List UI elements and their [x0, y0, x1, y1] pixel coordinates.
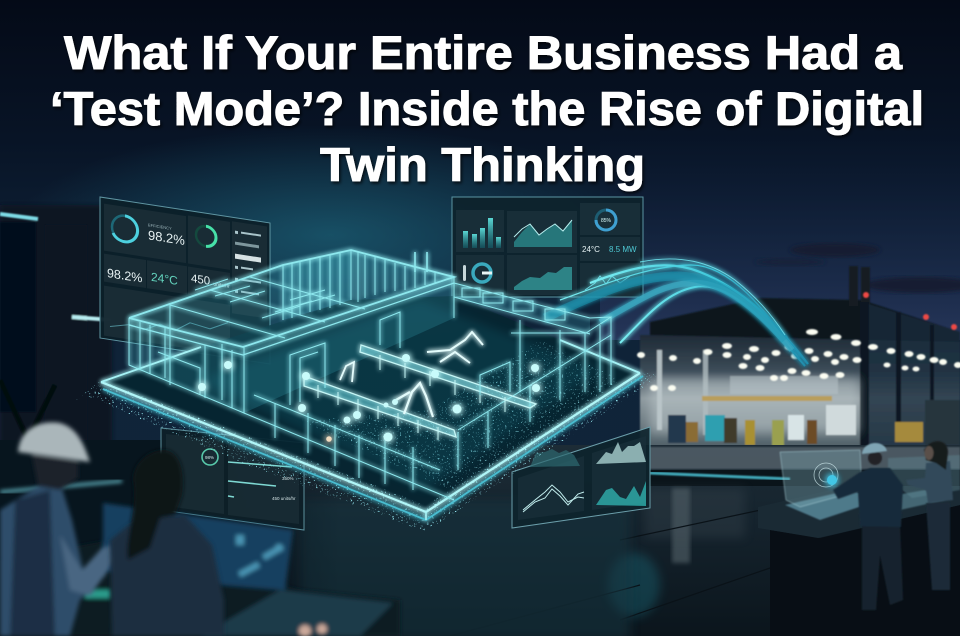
- face: [924, 446, 934, 460]
- cards: [456, 203, 640, 296]
- noisy area chart: [530, 449, 580, 467]
- hard hat: [862, 443, 887, 454]
- warning beacons: [863, 292, 957, 330]
- legs: [926, 503, 950, 590]
- status list: [235, 231, 261, 297]
- title line two: ‘Test Mode’? Inside the Rise of Digital: [50, 82, 924, 135]
- machinery and workers: [668, 400, 960, 446]
- console top: [758, 490, 960, 538]
- efficiency label: EFFICIENCY: [148, 222, 172, 231]
- particles: [70, 372, 662, 532]
- metric value two: 350%: [282, 476, 294, 481]
- portal frames: [290, 312, 510, 405]
- throughput value: 450 units/hr: [191, 273, 230, 291]
- panel cards: [104, 202, 267, 361]
- data wave ribbons: [545, 259, 808, 366]
- back right wall: [454, 283, 611, 470]
- torso and arm: [906, 461, 953, 503]
- second engineer: [906, 441, 953, 590]
- mini chart: [110, 305, 228, 345]
- robot arm front: [396, 383, 433, 417]
- digital twin platform: [70, 250, 662, 532]
- floor haze: [200, 300, 600, 490]
- chimneys: [849, 266, 870, 307]
- front lower wall: [244, 395, 454, 500]
- back conveyor: [360, 345, 536, 412]
- steel columns: [657, 302, 934, 452]
- floor: [0, 445, 960, 636]
- platform floor: [101, 296, 640, 512]
- power reading: 8.5 MW: [609, 245, 637, 254]
- building wireframe: [129, 250, 611, 500]
- console screen two: [885, 490, 945, 510]
- left wing: [129, 250, 454, 413]
- line chart: [523, 485, 584, 512]
- foreground console at left: [0, 503, 400, 636]
- bright plant core: [650, 378, 860, 433]
- tanks: [415, 252, 427, 272]
- platform rim: [101, 340, 643, 520]
- area chart bottom: [514, 267, 572, 290]
- head: [868, 451, 882, 465]
- bar chart: [463, 218, 501, 248]
- robot arm mid: [340, 362, 354, 382]
- torso and arm: [833, 468, 903, 527]
- shirt dark: [10, 490, 55, 636]
- robot arm rear: [427, 332, 483, 363]
- hard hat: [18, 422, 90, 462]
- title: [50, 26, 924, 191]
- head: [924, 441, 948, 470]
- torso: [0, 482, 108, 636]
- efficiency value lower: 98.2%: [107, 266, 142, 285]
- temperature value: 24°C: [151, 270, 178, 288]
- engineer in hard hat: [0, 422, 115, 636]
- machinery beam: [702, 396, 832, 401]
- lower left data panel: [161, 428, 304, 530]
- body: [110, 515, 224, 636]
- teal light strip: [0, 481, 122, 492]
- legs: [862, 525, 903, 610]
- control console right: [758, 490, 960, 636]
- left dark building structure: [0, 205, 340, 636]
- glass hall at right: [862, 302, 960, 450]
- console screen: [785, 490, 880, 520]
- teal area chart: [596, 481, 646, 506]
- status gauge: [196, 225, 216, 248]
- rear hologram screen: [888, 455, 960, 498]
- metric value: 450 units/hr: [272, 496, 296, 501]
- sensor nodes: [198, 354, 540, 442]
- ring gauge: [202, 449, 218, 465]
- divider cards: [518, 436, 646, 520]
- factory background: [640, 266, 960, 452]
- ring value: 98%: [205, 455, 214, 460]
- interior particles: [300, 340, 620, 500]
- ring gauge: [473, 264, 492, 282]
- engineer at console: [833, 443, 903, 610]
- top right data panel: [452, 197, 643, 297]
- efficiency value upper: 98.2%: [148, 227, 185, 248]
- hair: [127, 450, 183, 560]
- neck and face: [32, 455, 78, 490]
- translucent building walls: [129, 250, 590, 437]
- waveform: [585, 276, 630, 290]
- temperature reading: 24°C: [582, 245, 600, 254]
- woman in foreground: [110, 450, 224, 636]
- ceiling lights: [637, 329, 960, 391]
- holographic tablet: [780, 450, 862, 507]
- title line three: Twin Thinking: [320, 138, 645, 191]
- left data panel: [100, 197, 270, 364]
- console base: [770, 505, 960, 636]
- white area chart: [596, 442, 646, 464]
- lower right data panel: [512, 427, 650, 528]
- progress bars: [228, 462, 292, 497]
- donut gauge: [596, 210, 616, 230]
- thermometer: [463, 265, 466, 281]
- factory roof: [650, 298, 960, 342]
- cards: [166, 434, 299, 524]
- donut value: 85%: [601, 218, 612, 224]
- front conveyor: [304, 376, 456, 440]
- efficiency gauge: [112, 214, 138, 244]
- title line one: What If Your Entire Business Had a: [64, 26, 903, 79]
- arm: [60, 535, 115, 596]
- area chart top: [514, 220, 572, 247]
